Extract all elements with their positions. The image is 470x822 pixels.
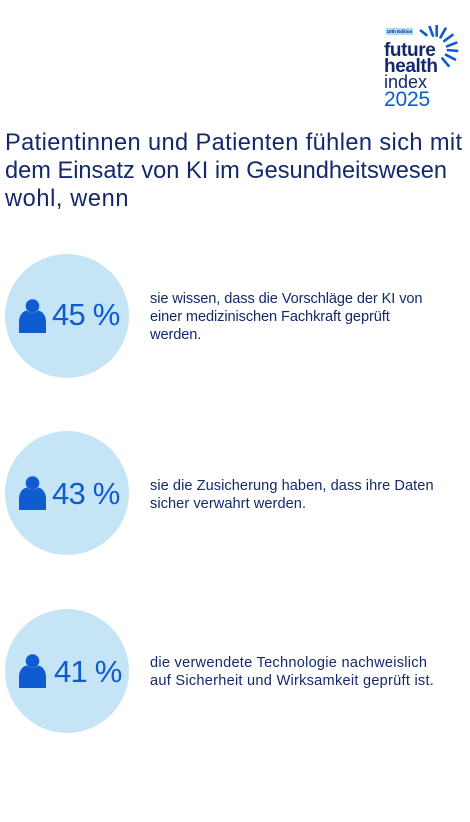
text: statement 2: sie die Zusicherung haben, dass ihre Daten — [150, 478, 434, 494]
percentage: 43 % — [52, 476, 119, 511]
logo wordmark: future — [384, 40, 435, 61]
stat circle: 41 % — [5, 609, 129, 733]
icon: person — [19, 654, 46, 688]
text: statement 3: auf Sicherheit und Wirksamkeit geprüft ist. — [150, 673, 434, 689]
text: statement 1: einer medizinischen Fachkraft geprüft — [150, 309, 390, 325]
stat circle: 45 % — [5, 254, 129, 378]
text: statement 2 — [150, 478, 434, 512]
title: dem Einsatz von KI im Gesundheitswesen — [5, 158, 447, 184]
logo: future health index 2025 — [384, 25, 458, 111]
icon: person — [19, 476, 46, 510]
text: statement 1 — [150, 291, 422, 343]
percentage: 45 % — [52, 297, 119, 332]
logo sunburst icon — [419, 25, 458, 68]
logo edition badge — [386, 28, 413, 35]
logo wordmark: health — [384, 56, 438, 76]
text: statement 3 — [150, 655, 434, 689]
logo edition badge: 10th Edition — [387, 29, 412, 34]
logo index line: index — [384, 72, 427, 92]
text: statement 2: sicher verwahrt werden. — [150, 496, 306, 512]
percentage: 41 % — [54, 654, 121, 689]
logo wordmark — [384, 40, 438, 76]
icon: person — [19, 299, 46, 333]
text: statement 3: die verwendete Technologie nachweislich — [150, 655, 427, 671]
title: wohl, wenn — [5, 186, 129, 212]
text: statement 1: sie wissen, dass die Vorschläge der KI von — [150, 291, 422, 307]
title: Patientinnen und Patienten fühlen sich mit — [5, 130, 463, 156]
title — [5, 130, 463, 212]
text: statement 1: werden. — [150, 327, 201, 343]
stat circle: 43 % — [5, 431, 129, 555]
logo year: 2025 — [384, 88, 430, 111]
